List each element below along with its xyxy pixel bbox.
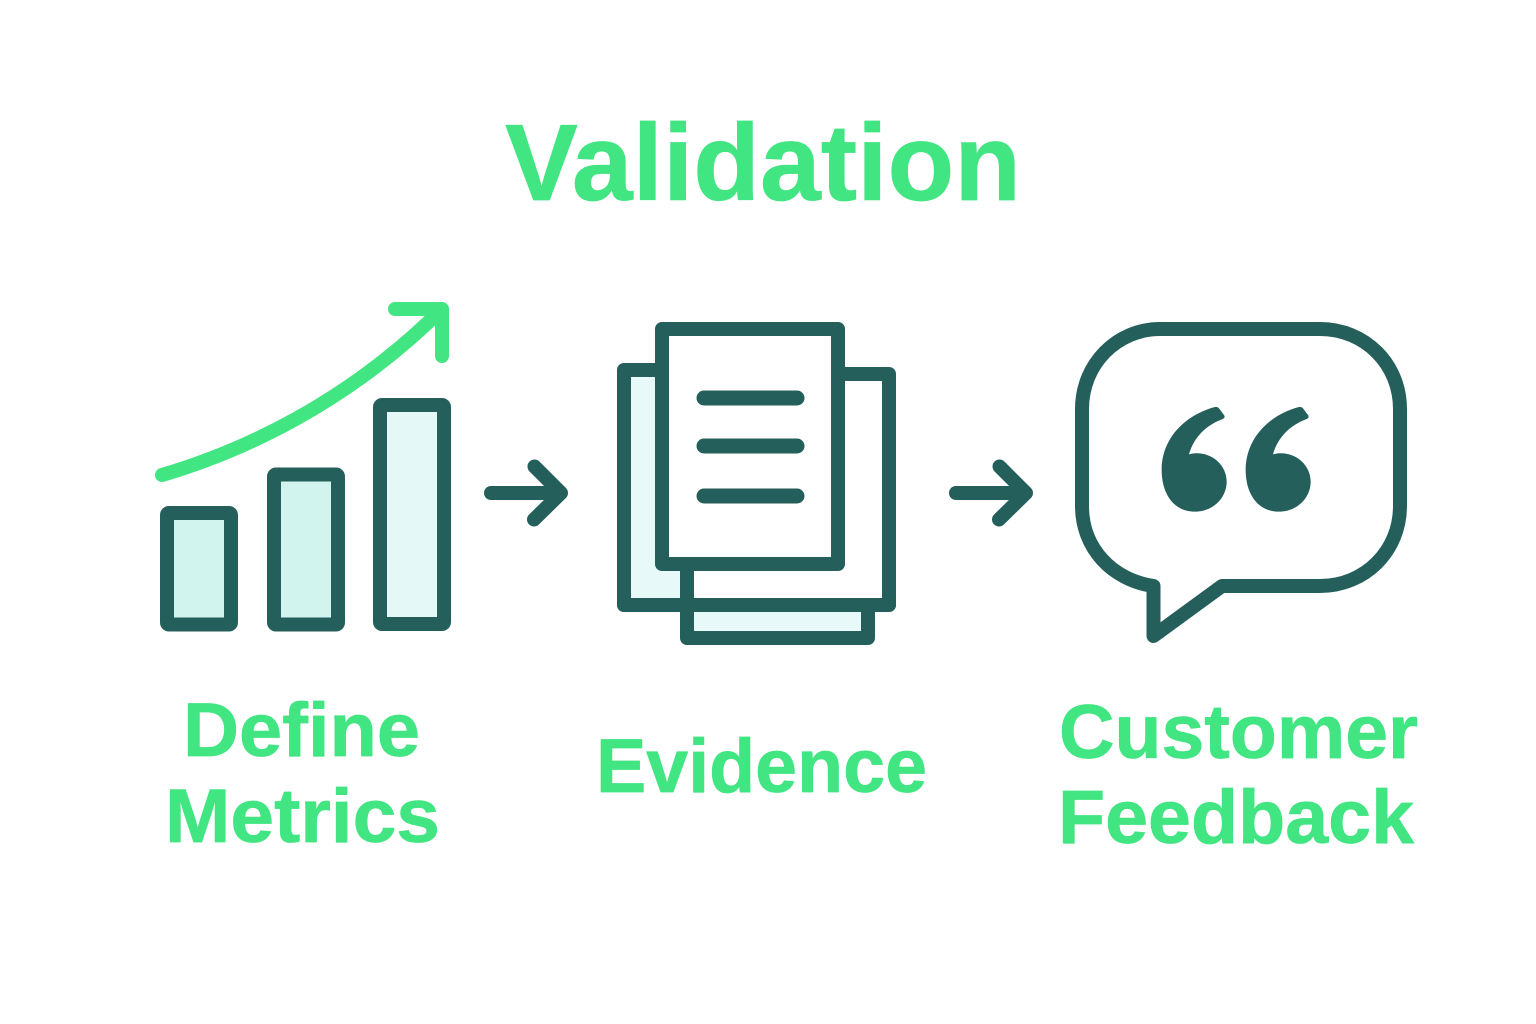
bar: tall bbox=[380, 405, 444, 624]
document: bottom page bbox=[687, 600, 868, 638]
document text lines bbox=[704, 398, 797, 496]
label: Define Metrics: Define bbox=[183, 688, 420, 773]
arrow: evidence to feedback bbox=[956, 466, 1026, 520]
document: right page bbox=[687, 374, 889, 605]
label: Customer Feedback: Feedback bbox=[1058, 775, 1415, 860]
speech bubble outline bbox=[1082, 329, 1400, 636]
icon: bar chart with rising arrow bbox=[162, 309, 444, 624]
document: front page bbox=[662, 329, 838, 564]
title: Validation bbox=[505, 102, 1021, 224]
document: left page bottom edge bbox=[624, 598, 889, 612]
label: Define Metrics: Metrics bbox=[165, 774, 440, 859]
icon: speech bubble with quotes bbox=[1082, 329, 1400, 636]
label: Customer Feedback: Customer bbox=[1059, 690, 1418, 775]
label: Evidence: Evidence bbox=[596, 724, 927, 809]
label: Define Metrics bbox=[165, 688, 440, 859]
bar: short bbox=[167, 513, 231, 624]
quotation marks bbox=[1162, 407, 1311, 512]
label: Customer Feedback bbox=[1058, 690, 1418, 860]
document: left page bbox=[624, 370, 724, 605]
arrow: rising trend bbox=[162, 309, 442, 475]
arrow: metrics to evidence bbox=[491, 466, 561, 520]
icon: stacked documents bbox=[624, 329, 889, 638]
bar: medium bbox=[274, 474, 338, 624]
